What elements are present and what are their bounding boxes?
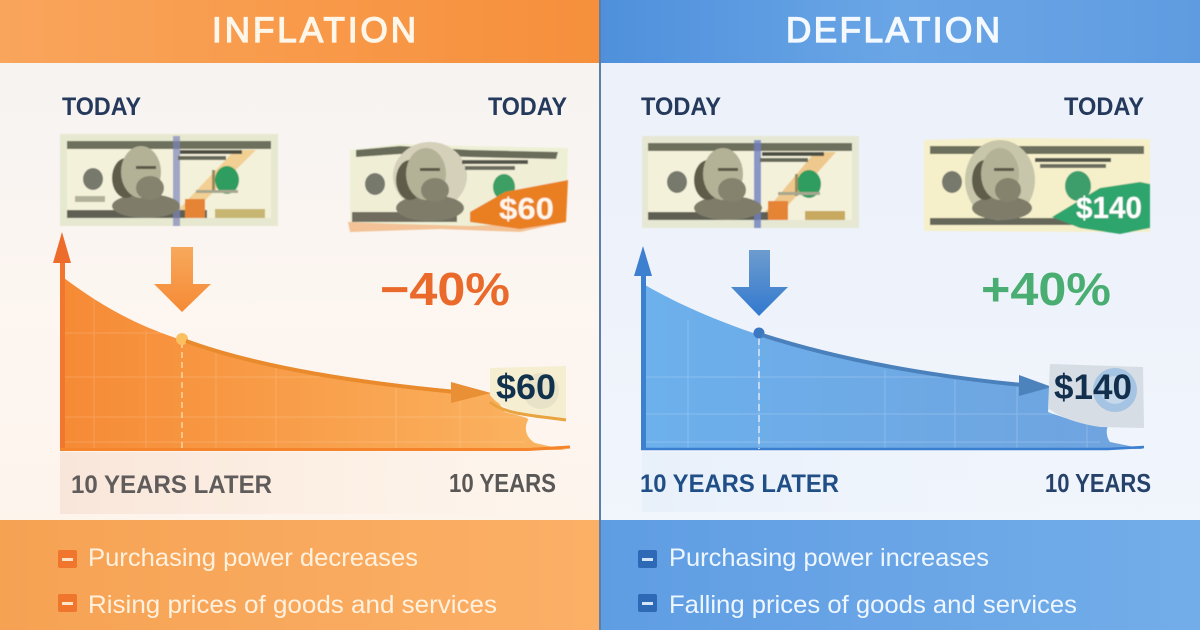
y axis arrow <box>634 246 652 450</box>
banknote: strong bill with 140 dollar flash <box>924 138 1150 234</box>
curve arrow <box>762 335 1052 396</box>
banknote: worn bill with 60 dollar flash: $60 <box>499 191 554 226</box>
x axis <box>60 447 570 450</box>
label: today right: TODAY <box>1064 93 1144 121</box>
label: today left: TODAY <box>641 93 721 121</box>
marker: midpoint with dashed drop line <box>754 328 764 449</box>
label: today left: TODAY <box>62 93 141 121</box>
big arrow down <box>731 250 788 316</box>
banknote: strong bill with 140 dollar flash: $140 <box>1076 190 1142 225</box>
marker: midpoint with dashed drop line <box>176 333 188 449</box>
big arrow down <box>154 247 211 312</box>
change: plus 40 percent: +40% <box>981 263 1111 315</box>
label strip under axis <box>642 452 1162 512</box>
center divider <box>599 0 601 630</box>
change: minus 40 percent: −40% <box>380 263 510 315</box>
label: 10 years later: 10 YEARS LATER <box>640 470 839 498</box>
x axis <box>641 447 1144 449</box>
label: 10 years: 10 YEARS <box>449 468 556 498</box>
footer: inflation bullets <box>0 520 600 630</box>
grid lines <box>64 300 525 450</box>
heading band: inflation: INFLATION <box>212 11 416 50</box>
chart area <box>60 278 566 450</box>
bullet 2: Falling prices of goods and services <box>669 591 1077 619</box>
end value tag: 60 dollars: $60 <box>496 368 556 407</box>
heading band: inflation <box>0 0 600 63</box>
label: 10 years: 10 YEARS <box>1045 468 1151 498</box>
bullet 1: Purchasing power decreases <box>88 544 418 572</box>
chart: inflation value decline <box>53 232 570 450</box>
bullet 2: Rising prices of goods and services <box>88 591 497 619</box>
end value tag: 140 dollars: $140 <box>1054 368 1132 407</box>
banknote: crisp 100 dollar bill <box>642 136 859 228</box>
label strip under axis <box>60 452 580 514</box>
heading band: deflation: DEFLATION <box>786 11 1000 50</box>
y axis arrow <box>53 232 71 450</box>
curve arrow <box>186 341 491 403</box>
label: today right: TODAY <box>488 93 567 121</box>
chart: deflation value <box>634 246 1144 450</box>
end value tag: 140 dollars <box>1048 364 1144 428</box>
end value tag: 60 dollars <box>490 366 566 420</box>
banknote: worn bill with 60 dollar flash <box>348 142 568 232</box>
bullet 1: Purchasing power increases <box>669 544 989 572</box>
grid lines <box>645 320 1100 449</box>
panel: inflation <box>0 0 600 630</box>
footer: deflation bullets <box>600 520 1200 630</box>
panel: deflation <box>600 0 1200 630</box>
chart area <box>642 285 1144 449</box>
label: 10 years later: 10 YEARS LATER <box>71 471 272 499</box>
heading band: deflation <box>600 0 1200 63</box>
banknote: crisp 100 dollar bill <box>60 134 278 226</box>
